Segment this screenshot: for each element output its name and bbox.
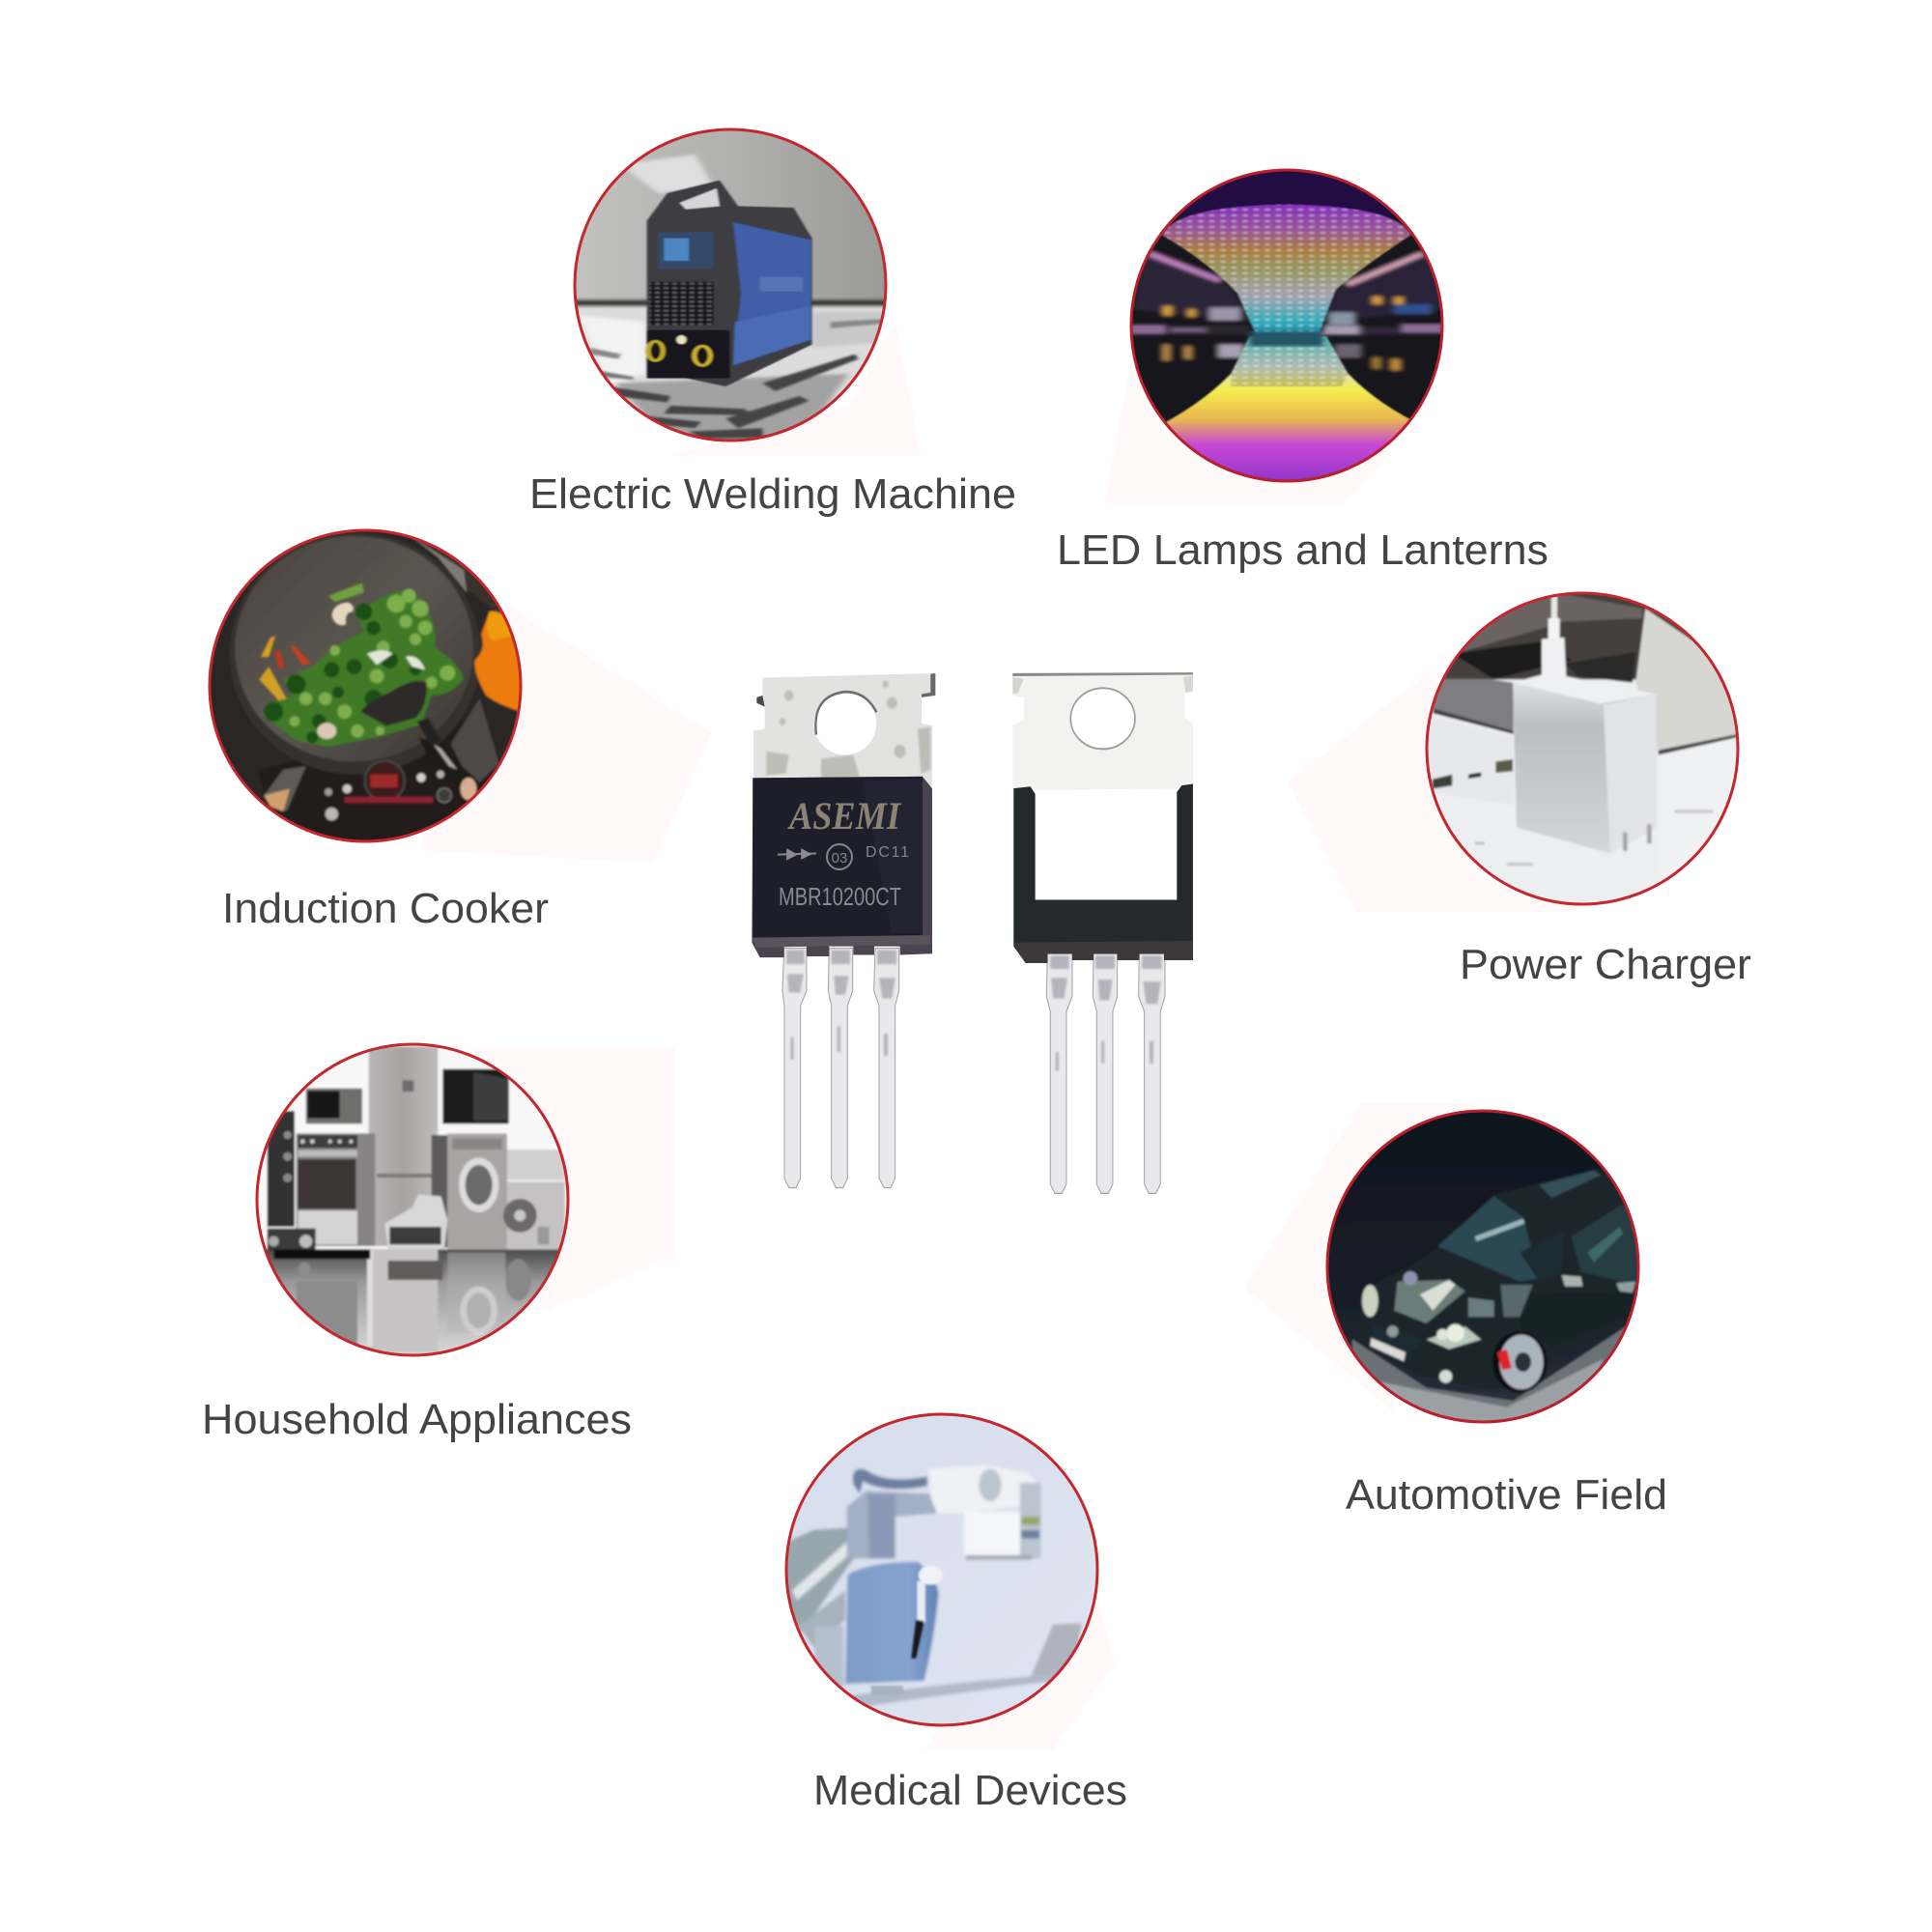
photo: car cutaway: [1321, 1104, 1645, 1427]
ring: LED: [1131, 170, 1442, 481]
pale shadow: appliances: [469, 1047, 674, 1312]
panel: medical devices: [782, 1410, 1127, 1814]
plastic body: back: [1013, 784, 1193, 963]
label: automotive: Automotive Field: [1346, 1471, 1667, 1519]
part number: MBR10200CT: [779, 882, 901, 911]
pale shadow: medical: [924, 1589, 1115, 1749]
label: cooker: Induction Cooker: [222, 885, 549, 932]
logo: circle mark: 03: [832, 850, 847, 867]
logo: circle mark: [827, 844, 852, 869]
ring: medical: [786, 1414, 1097, 1725]
label: LED: LED Lamps and Lanterns: [1057, 526, 1548, 574]
lead plating marks: back: [1050, 955, 1162, 1070]
leads: back: [1046, 953, 1165, 1193]
panel: power charger: [1426, 591, 1750, 987]
brand text: ASEMI: ASEMI: [786, 794, 901, 838]
panel: induction cooker: [209, 529, 549, 923]
panel: household appliances: [205, 1043, 630, 1442]
pale shadow: cooker: [419, 604, 712, 863]
leads: front: [782, 949, 899, 1188]
mounting hole: back: [1070, 688, 1135, 749]
photo: LED lights: [1132, 172, 1441, 479]
pale shadow: automotive: [1244, 1103, 1479, 1410]
photo: welding machine: [576, 131, 885, 439]
component: transistor front view: [752, 673, 935, 1188]
label: charger: Power Charger: [1460, 941, 1751, 988]
date code: DC11: [866, 844, 909, 861]
panel: LED lamps and lanterns: [1057, 164, 1548, 574]
pale shadow: LED: [1104, 355, 1391, 505]
metal tab: back: [1012, 672, 1193, 790]
ring: welding: [575, 129, 886, 440]
photo: appliances: [265, 1045, 566, 1354]
label: appliances: Household Appliances: [202, 1396, 632, 1443]
panel: electric welding machine: [529, 123, 1016, 518]
metal tab: front: [753, 673, 935, 785]
lead plating marks: front: [786, 950, 896, 1060]
ring: charger: [1427, 593, 1738, 904]
label: medical: Medical Devices: [813, 1767, 1127, 1814]
pale shadow: charger: [1288, 671, 1577, 912]
photo: white charger: [1428, 595, 1737, 902]
label: welding: Electric Welding Machine: [529, 470, 1016, 518]
pale shadow: welding: [670, 322, 921, 456]
photo: medical device: [782, 1410, 1104, 1729]
diode symbol: [778, 850, 816, 859]
mounting hole: front: [814, 692, 876, 755]
component: transistor back view: [1012, 672, 1193, 1193]
ring: cooker: [210, 530, 521, 841]
photo: wok on cooker: [211, 531, 520, 840]
ring: appliances: [257, 1044, 568, 1355]
panel: automotive field: [1325, 1109, 1665, 1509]
ring: automotive: [1327, 1111, 1638, 1422]
plastic body: front: [752, 777, 932, 957]
